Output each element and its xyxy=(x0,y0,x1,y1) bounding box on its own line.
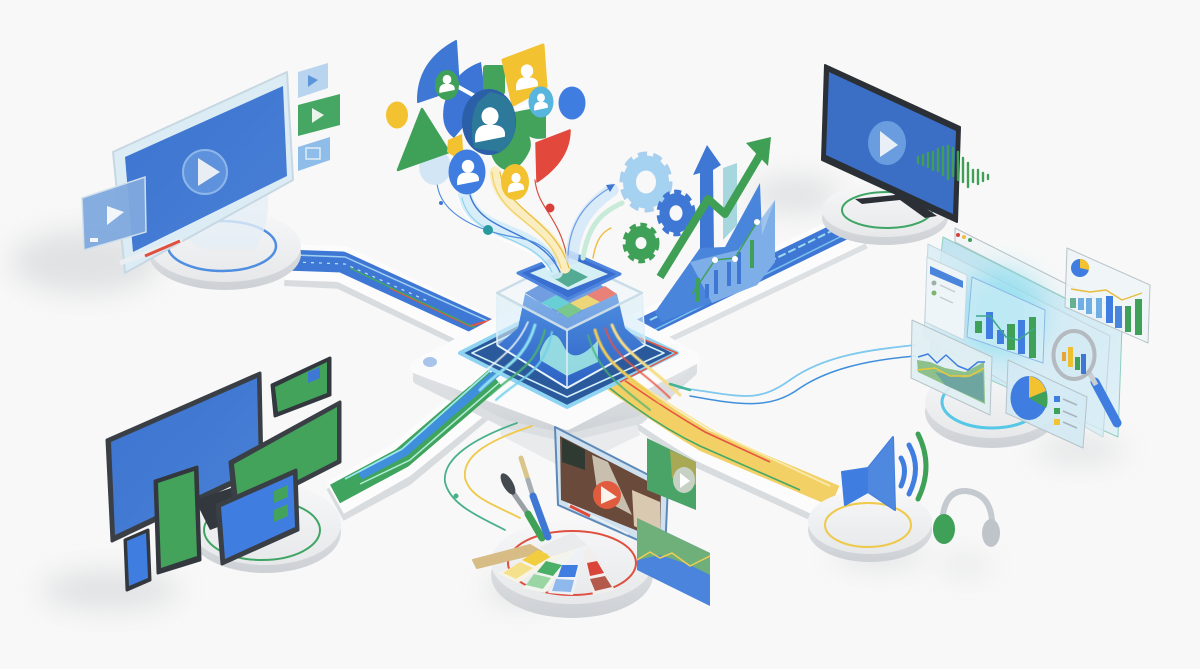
central hub xyxy=(345,252,835,496)
yellow flow band xyxy=(492,172,569,268)
play button xyxy=(183,150,227,194)
icon cluster: people and shapes xyxy=(386,41,586,200)
gears xyxy=(622,154,694,261)
yellow person card xyxy=(503,45,546,105)
road: bottom-left, green xyxy=(335,378,495,505)
wood stick xyxy=(473,545,542,568)
blue tablet xyxy=(217,470,298,564)
swatch hinge xyxy=(540,532,587,557)
hub flow lines xyxy=(470,322,680,410)
right top pane xyxy=(1065,248,1150,343)
gear: blue xyxy=(658,192,694,234)
green phone xyxy=(155,467,200,573)
small blue phone xyxy=(125,530,150,590)
base disc xyxy=(822,183,948,245)
gear: pale blue xyxy=(622,154,670,210)
gear: green xyxy=(624,225,658,261)
hub dark tray xyxy=(460,300,677,407)
blue ball xyxy=(558,86,586,120)
side panel xyxy=(925,257,967,340)
light blue disc xyxy=(419,149,451,185)
analytics dashboard, right xyxy=(911,228,1150,448)
speaker, bottom right xyxy=(808,434,1000,562)
small green tablet xyxy=(272,358,330,416)
base disc xyxy=(491,520,653,618)
devices, bottom left xyxy=(107,358,341,590)
yellow swatch strip xyxy=(498,546,570,583)
cast shadows xyxy=(10,177,1125,610)
back pane with window dots xyxy=(955,228,1122,327)
small green person xyxy=(435,70,459,100)
base disc xyxy=(149,210,301,290)
data roads xyxy=(285,222,860,512)
front map pane xyxy=(911,320,992,415)
yellow ball xyxy=(386,102,408,128)
road overlays on plateau xyxy=(345,366,835,496)
screen frame xyxy=(822,65,960,222)
blue up arrow xyxy=(693,145,721,250)
green half disc xyxy=(514,106,546,139)
green tab xyxy=(483,65,505,95)
video monitor, top left xyxy=(82,63,340,290)
monitor foot xyxy=(195,485,250,530)
green triangle xyxy=(398,109,449,170)
front pie pane xyxy=(1006,360,1087,448)
green swatch strip xyxy=(522,548,577,593)
yellow person xyxy=(501,164,529,200)
top ring xyxy=(518,252,620,299)
TV monitor, top right xyxy=(822,65,988,245)
small yellow cube xyxy=(447,134,463,157)
green video pane xyxy=(647,438,696,510)
flows rising to gears xyxy=(568,184,622,258)
glass stand xyxy=(172,195,268,250)
road: bottom-right, yellow xyxy=(610,378,835,512)
red sail xyxy=(536,130,570,182)
base disc xyxy=(189,483,341,573)
video pane xyxy=(555,427,668,552)
green brush xyxy=(498,471,542,538)
play button xyxy=(868,121,906,165)
road: top-left, blue xyxy=(285,255,500,337)
red connector xyxy=(535,180,568,262)
headphones xyxy=(933,491,1000,547)
cyan glow xyxy=(958,271,1042,355)
base disc xyxy=(808,490,932,562)
green waveform xyxy=(918,146,988,187)
sound waves xyxy=(901,434,926,499)
glass cube with core xyxy=(497,252,645,389)
creative studio, bottom centre xyxy=(445,423,710,618)
large glass person xyxy=(462,89,516,155)
flow arcs xyxy=(445,423,532,530)
light blue person xyxy=(528,86,554,118)
red swatch strip xyxy=(584,547,615,595)
flows rising to the people cluster xyxy=(437,172,622,272)
blue half disc left xyxy=(418,41,459,102)
stand xyxy=(855,178,937,218)
screen xyxy=(826,72,956,214)
blue person xyxy=(448,150,486,194)
colored tiles xyxy=(525,285,617,318)
back mountain xyxy=(655,183,775,322)
bars and trend xyxy=(692,219,760,302)
flows to the dashboard xyxy=(670,345,915,404)
base disc xyxy=(925,366,1059,448)
white connector xyxy=(455,85,530,110)
hub plateau xyxy=(417,288,693,470)
floating player window xyxy=(82,177,146,250)
road: top-right, blue xyxy=(640,222,860,337)
growth chart xyxy=(655,137,775,322)
side thumbnails xyxy=(298,63,340,171)
blue half disc behind xyxy=(443,62,486,138)
main glass pane xyxy=(930,237,1122,437)
second glass pane xyxy=(924,244,1110,437)
blue brush xyxy=(521,458,548,537)
swatch fan xyxy=(498,532,615,595)
red progress bar xyxy=(120,240,182,263)
wide green tablet xyxy=(230,402,340,516)
speaker cone xyxy=(842,437,895,510)
large monitor xyxy=(107,373,262,541)
wave chart pane xyxy=(637,518,710,606)
blue flow band xyxy=(458,195,560,272)
blue screen xyxy=(125,86,287,252)
teal bar xyxy=(723,163,737,240)
bar chart panel xyxy=(967,277,1045,363)
green trend arrow xyxy=(660,137,771,277)
thin blue connector with nodes xyxy=(437,183,556,264)
glass frame xyxy=(113,72,293,273)
blue swatch strip xyxy=(548,547,584,595)
magnifying glass xyxy=(1054,331,1117,423)
